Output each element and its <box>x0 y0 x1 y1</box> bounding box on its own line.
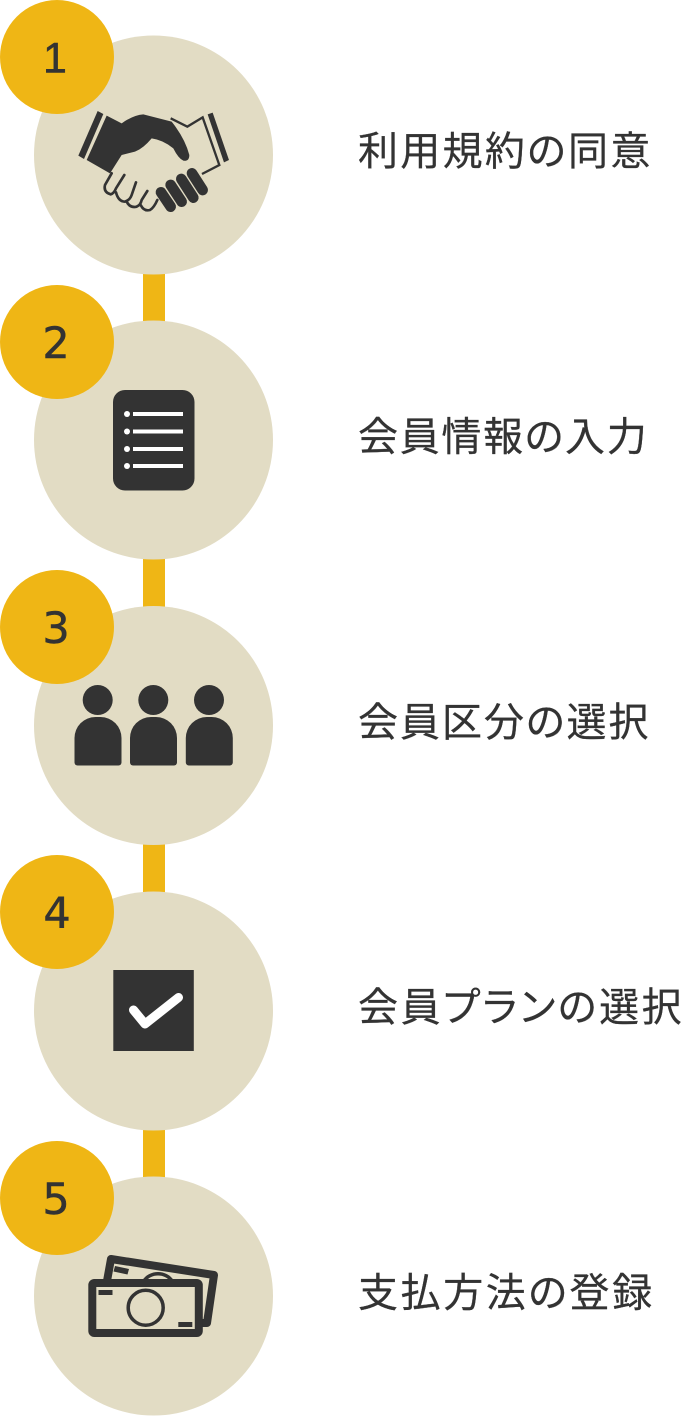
step 3 circle <box>34 606 273 845</box>
connector line <box>143 260 165 1190</box>
step 1 circle <box>34 36 273 274</box>
step 4 circle <box>34 892 273 1130</box>
step 1 label: 利用規約の同意 <box>358 119 653 177</box>
icon: banknotes <box>92 1259 214 1333</box>
step 5 badge <box>0 1141 114 1255</box>
step 2 label: 会員情報の入力 <box>358 404 648 462</box>
step 2 <box>0 285 648 560</box>
step 4 <box>0 855 681 1130</box>
step 5 label: 支払方法の登録 <box>358 1260 655 1318</box>
step 3 badge <box>0 570 114 684</box>
step 4 badge <box>0 855 114 969</box>
step 2 number: 2 <box>42 319 70 369</box>
step 1 badge <box>0 0 114 114</box>
step 2 circle <box>34 320 273 560</box>
icon: checkbox <box>113 970 194 1051</box>
icon: handshake <box>78 111 229 210</box>
step 4 label: 会員プランの選択 <box>358 975 681 1033</box>
step 5 circle <box>34 1176 273 1416</box>
step 3 number: 3 <box>42 604 70 654</box>
icon: three people <box>74 685 233 766</box>
step 5 <box>0 1141 655 1416</box>
step 1 <box>0 0 653 274</box>
step 2 badge <box>0 285 114 399</box>
step 5 number: 5 <box>42 1175 70 1225</box>
step 3 <box>0 570 651 845</box>
icon: list <box>113 390 194 490</box>
step 4 number: 4 <box>43 889 71 939</box>
step 3 label: 会員区分の選択 <box>358 690 651 748</box>
step 1 number: 1 <box>43 34 67 82</box>
